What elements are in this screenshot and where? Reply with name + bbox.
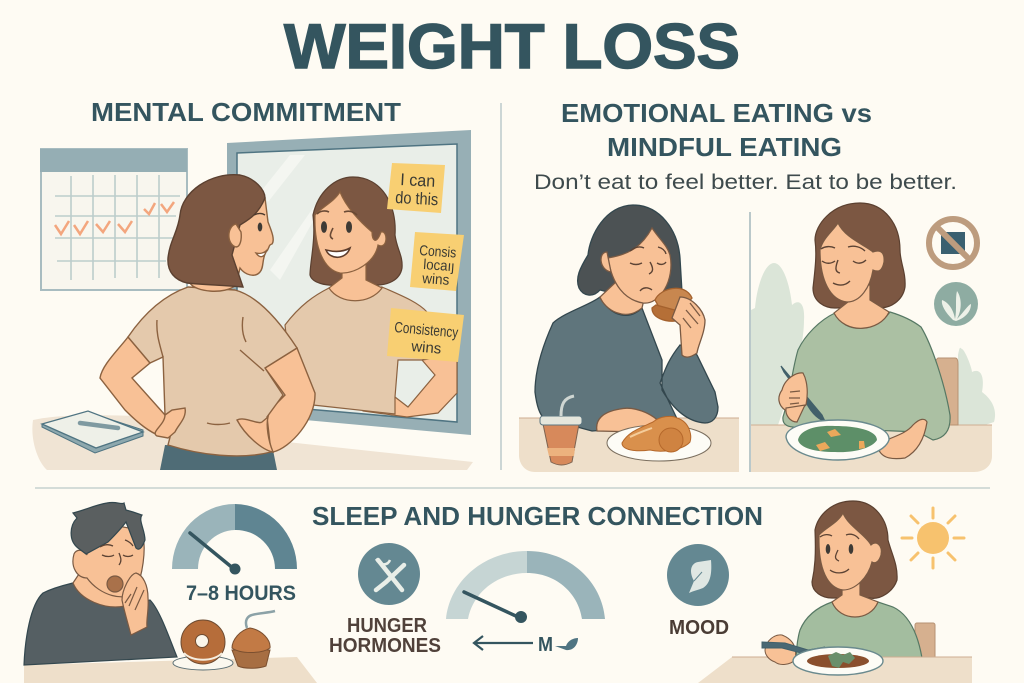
face [608, 228, 671, 303]
woman from behind [100, 175, 315, 470]
heading: sleep and hunger connection: SLEEP AND HUNGER CONNECTION [312, 501, 763, 531]
icon: leaf badge [934, 282, 978, 326]
sticky note: Consis local wins: locaıȷ [423, 257, 455, 275]
icon: drink cup [540, 396, 582, 465]
mindful woman [779, 203, 950, 459]
reflected arm [363, 355, 457, 417]
table [751, 425, 992, 472]
icon: no sign [929, 219, 977, 267]
heading: emotional vs mindful eating: MINDFUL EATING [607, 132, 842, 162]
hair [812, 501, 897, 598]
tagline: Don’t eat to feel better. Eat to be better. [534, 171, 957, 194]
icon: calendar [40, 149, 187, 290]
icon: sun [902, 508, 964, 568]
desk [32, 415, 473, 470]
reflected face [315, 192, 386, 273]
sweater [796, 602, 922, 665]
label: hunger hormones [329, 614, 441, 657]
trousers [160, 445, 277, 470]
chair [905, 358, 958, 425]
sad woman [535, 205, 718, 432]
icon: notebook [42, 411, 143, 453]
sticky note: I can do this: do this [395, 188, 439, 209]
face [73, 526, 144, 597]
neck [834, 285, 889, 328]
icon: hunger hormones [358, 543, 420, 605]
panel: tired man with snacks [24, 502, 317, 683]
plate of salad [786, 420, 889, 460]
heading: mental commitment: MENTAL COMMITMENT [91, 97, 401, 127]
panel: emotional eating [519, 205, 739, 472]
background plants [751, 263, 995, 425]
burger [652, 288, 692, 321]
neck [832, 578, 878, 617]
sticky note: Consistency wins [387, 308, 464, 362]
left arm [100, 337, 170, 436]
man eating [24, 502, 177, 665]
face [820, 223, 884, 302]
table [698, 657, 972, 683]
reflected hair [310, 177, 402, 285]
sweater [535, 297, 718, 431]
sticky note: Consis local wins: wins [421, 271, 450, 289]
table [519, 418, 739, 472]
reflected neck [329, 262, 382, 301]
heading: emotional vs mindful eating [561, 98, 872, 162]
hair [168, 175, 265, 287]
face [819, 513, 881, 590]
gauge: hunger [446, 551, 605, 623]
neck [600, 280, 645, 314]
reflection of woman [285, 177, 457, 417]
chair [915, 623, 935, 659]
hand with fork [762, 635, 825, 664]
hand [672, 297, 705, 357]
shirt [128, 287, 297, 456]
panel: mindful eating [751, 203, 995, 472]
hand [122, 573, 148, 635]
hair [813, 203, 905, 308]
heading: emotional vs mindful eating: EMOTIONAL EATING vs [561, 98, 872, 128]
table [24, 657, 317, 683]
panel: mental commitment illustration [32, 130, 473, 470]
reflection face details [317, 211, 357, 257]
sweater [24, 583, 177, 665]
hands [779, 373, 807, 411]
ear [229, 224, 241, 247]
label: hunger hormones: HUNGER [347, 614, 427, 637]
label: mood: MOOD [669, 616, 729, 639]
icon: muffin [232, 611, 275, 668]
sweater [783, 312, 950, 440]
hair [578, 205, 682, 300]
plate of fried food [607, 416, 711, 461]
right arm [240, 348, 315, 452]
gauge: 7-8 hours: 7–8 HOURS [186, 582, 296, 605]
neck and face profile [190, 198, 273, 291]
title: WEIGHT LOSS [284, 12, 740, 82]
sticky note: Consistency wins: Consistency [394, 319, 459, 342]
hair [71, 502, 145, 554]
sticky note: Consis local wins: Consis [419, 243, 457, 262]
label: hunger hormones: HORMONES [329, 634, 441, 657]
sticky note: I can do this: I can [400, 170, 436, 191]
sticky note: Consistency wins: wins [410, 338, 442, 358]
woman [796, 501, 922, 665]
mirror [227, 130, 471, 435]
reflected shirt [285, 287, 440, 414]
neck [73, 565, 125, 607]
hands [155, 408, 185, 438]
sticky note: I can do this [387, 163, 445, 213]
arrow with M label [474, 634, 578, 656]
icon: mood leaf [667, 544, 729, 606]
fork [781, 366, 828, 423]
panel: happy woman [698, 501, 972, 683]
gauge: 7-8 hours [172, 504, 297, 605]
sticky note: Consis local wins [410, 232, 464, 291]
plate of food [793, 647, 883, 675]
arrow with M label: M [538, 634, 553, 656]
icon: donut on plate [173, 620, 233, 670]
